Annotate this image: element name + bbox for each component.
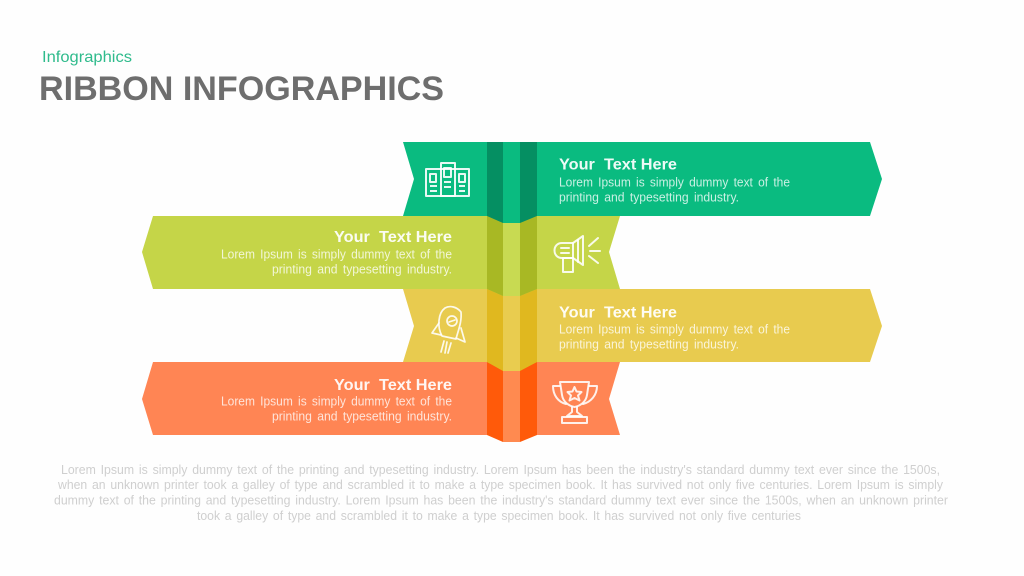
text block: yellow: Your Text Here	[559, 304, 677, 322]
text block: orange: Lorem Ipsum is simply dummy text of the	[221, 394, 452, 408]
text block: yellow: printing and typesetting industry.	[559, 338, 739, 352]
text block: lime: Your Text Here	[334, 229, 452, 246]
text block: orange	[221, 377, 452, 424]
text block: orange: Your Text Here	[334, 377, 452, 394]
footer paragraph	[54, 463, 948, 523]
icon: buildings	[426, 163, 469, 196]
ribbon 1: green	[403, 142, 882, 223]
text block: yellow	[559, 304, 790, 352]
text block: lime: printing and typesetting industry.	[272, 262, 452, 276]
icon: trophy	[553, 382, 597, 423]
text block: lime: Lorem Ipsum is simply dummy text of the	[221, 248, 452, 262]
ribbon 3: yellow	[403, 289, 882, 371]
ribbon 2: lime	[142, 216, 620, 296]
subtitle: Infographics: Infographics	[42, 49, 132, 66]
text block: green: Your Text Here	[559, 156, 677, 174]
text block: orange: printing and typesetting industry.	[272, 410, 452, 424]
icon: rocket	[432, 307, 465, 353]
footer paragraph: dummy text of the printing and typesetting industry. Lorem Ipsum has been the industry's standard dummy text ever since the 1500s, when an unknown printer	[54, 494, 948, 508]
text block: yellow: Lorem Ipsum is simply dummy text of the	[559, 322, 790, 336]
footer paragraph: Lorem Ipsum is simply dummy text of the printing and typesetting industry. Lorem Ipsum has been the industry's standard dummy text ever since the 1500s,	[61, 463, 940, 477]
text block: green: printing and typesetting industry.	[559, 190, 739, 204]
text block: green: Lorem Ipsum is simply dummy text of the	[559, 176, 790, 190]
footer paragraph: took a galley of type and scrambled it to make a type specimen book. It has survived not only five centuries	[197, 509, 801, 523]
footer paragraph: when an unknown printer took a galley of type and scrambled it to make a type specimen book. It has survived not only five centuries. Lorem Ipsum is simply	[57, 478, 944, 492]
text block: lime	[221, 229, 452, 276]
ribbon 4: orange	[142, 362, 620, 442]
text block: green	[559, 156, 790, 204]
title: RIBBON INFOGRAPHICS	[39, 70, 444, 108]
icon: megaphone	[554, 236, 600, 272]
